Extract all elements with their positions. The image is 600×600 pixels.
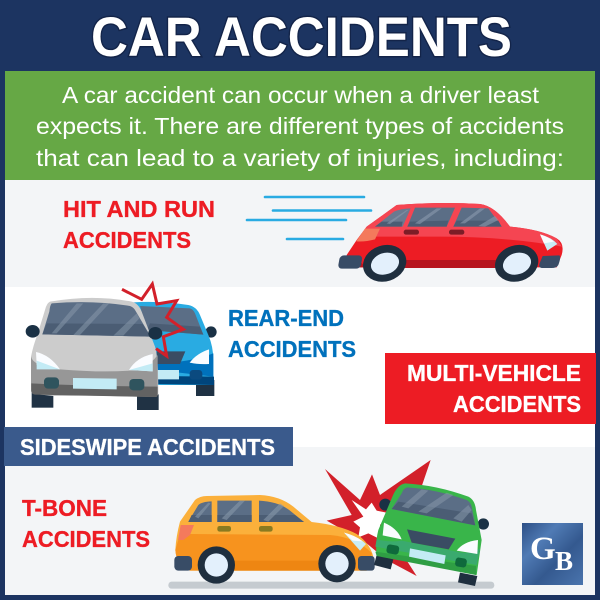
intro panel: that can lead to a variety of injuries, including:: [36, 145, 564, 171]
callout: multi-vehicle accidents: MULTI-VEHICLE: [407, 360, 581, 386]
callout: sideswipe accidents: [4, 427, 293, 466]
heading: hit and run accidents: ACCIDENTS: [63, 227, 191, 253]
logo: GB: [522, 523, 583, 585]
logo: GB: B: [555, 546, 573, 576]
icon: t-bone collision: [168, 460, 494, 589]
intro panel: [5, 71, 595, 180]
green car: [374, 483, 489, 586]
icon: red car: [338, 203, 563, 287]
heading: hit and run accidents: HIT AND RUN: [63, 196, 215, 222]
intro panel: expects it. There are different types of accidents: [36, 113, 564, 139]
gray car: [26, 298, 162, 410]
callout: multi-vehicle accidents: [385, 353, 596, 424]
callout: multi-vehicle accidents: ACCIDENTS: [453, 391, 581, 417]
orange car: [174, 495, 375, 584]
icon: crash star outline: [122, 284, 183, 356]
heading: rear-end accidents: REAR-END: [228, 305, 344, 331]
panel: rear-end and multi-vehicle: [5, 287, 595, 447]
callout: sideswipe accidents: SIDESWIPE ACCIDENTS: [20, 434, 275, 460]
logo: GB: G: [530, 531, 556, 567]
heading: t-bone accidents: ACCIDENTS: [22, 526, 150, 552]
blue car: [133, 302, 217, 396]
panel: t-bone: [5, 447, 595, 595]
heading: t-bone accidents: T-BONE: [22, 495, 107, 521]
icon: rear-end collision cars: [26, 284, 217, 410]
title: CAR ACCIDENTS: [91, 5, 512, 68]
heading: rear-end accidents: ACCIDENTS: [228, 336, 356, 362]
explosion: [325, 460, 431, 576]
panel: hit and run: [5, 180, 595, 287]
icon: speed lines: [247, 197, 371, 239]
intro panel: A car accident can occur when a driver least: [62, 82, 540, 108]
road shadow: [168, 582, 494, 589]
